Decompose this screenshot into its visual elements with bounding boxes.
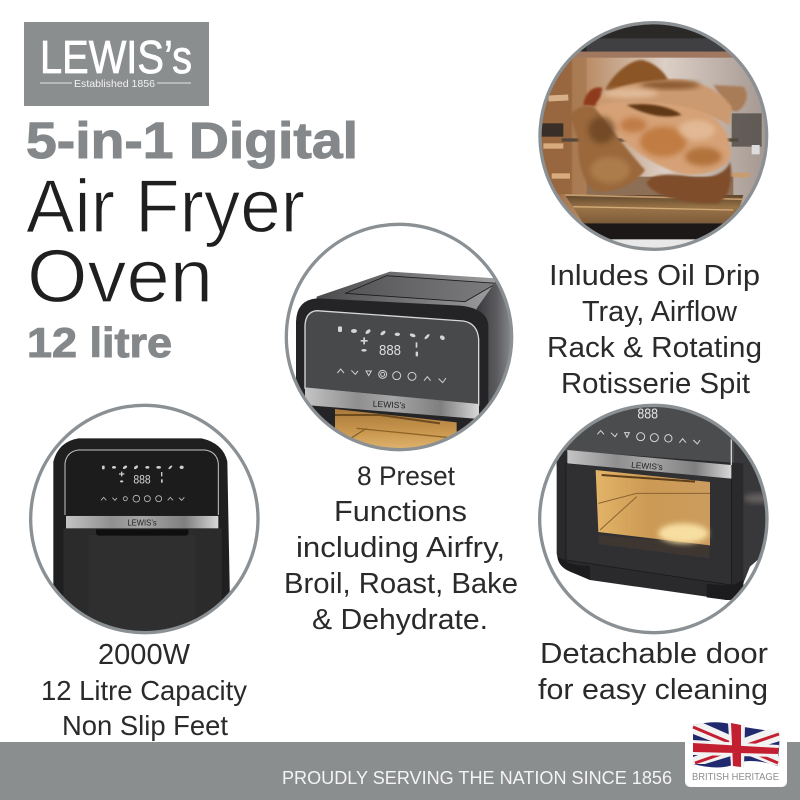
panel: open window door circle: LEWIS’s — [631, 460, 663, 472]
panel: control panel close-up circle — [283, 222, 517, 455]
logo: Lewis's Established 1856 — [24, 22, 209, 106]
badge: British Heritage flag — [685, 722, 787, 787]
caption: oil drip tray and rotisserie: Rotisserie Spit — [561, 368, 750, 400]
badge: British Heritage flag: BRITISH HERITAGE — [692, 772, 779, 783]
caption: power and capacity: Non Slip Feet — [62, 710, 228, 741]
touch controls — [597, 431, 700, 444]
caption: power and capacity: 2000W — [98, 639, 191, 671]
caption: preset functions: 8 Preset — [357, 461, 455, 491]
heading: 12 litre: 12 litre — [27, 319, 172, 366]
caption: oil drip tray and rotisserie: Rack & Rotating — [547, 332, 762, 364]
caption: detachable door: Detachable door — [540, 638, 768, 670]
heading: 5-in-1 Digital: 5-in-1 Digital — [26, 112, 358, 169]
preset function icons — [338, 326, 446, 356]
caption: oil drip tray and rotisserie: Inludes Oil Drip — [549, 260, 760, 292]
icon: union jack — [693, 722, 780, 768]
caption: oil drip tray and rotisserie: Tray, Airflow — [582, 296, 738, 328]
panel: oven front circle: LEWIS’s — [127, 519, 157, 528]
caption: preset functions: Functions — [334, 496, 467, 528]
caption: detachable door — [538, 638, 768, 706]
preset function icons — [102, 465, 184, 483]
heading: Air Fryer: Air Fryer — [26, 164, 305, 248]
888 display: 888 — [133, 473, 151, 487]
caption: detachable door: for easy cleaning — [538, 674, 768, 706]
caption: oil drip tray and rotisserie — [547, 260, 762, 400]
888 display: 888 — [637, 407, 658, 423]
logo: Lewis's Established 1856: Established 1856 — [74, 78, 155, 90]
feet of door — [557, 557, 743, 600]
caption: preset functions: Broil, Roast, Bake — [284, 568, 518, 600]
caption: power and capacity — [41, 639, 247, 741]
touch controls — [101, 495, 184, 502]
888 display: 888 — [379, 343, 401, 359]
panel: control panel close-up circle: LEWIS’s — [373, 399, 406, 410]
caption: preset functions: & Dehydrate. — [312, 604, 488, 636]
caption: power and capacity: 12 Litre Capacity — [41, 675, 247, 706]
panel: rotisserie chicken photo circle — [537, 20, 770, 256]
panel: open window door circle — [537, 402, 777, 640]
chicken — [570, 60, 747, 204]
caption: preset functions: including Airfry, — [296, 532, 505, 564]
touch controls — [337, 369, 446, 383]
heading: Oven: Oven — [27, 234, 213, 318]
caption: preset functions — [284, 461, 518, 636]
footer band: PROUDLY SERVING THE NATION SINCE 1856 — [282, 768, 672, 788]
panel: oven front circle — [27, 403, 263, 640]
logo: Lewis's Established 1856: LEWIS’s — [40, 31, 192, 83]
footer band — [0, 742, 800, 800]
